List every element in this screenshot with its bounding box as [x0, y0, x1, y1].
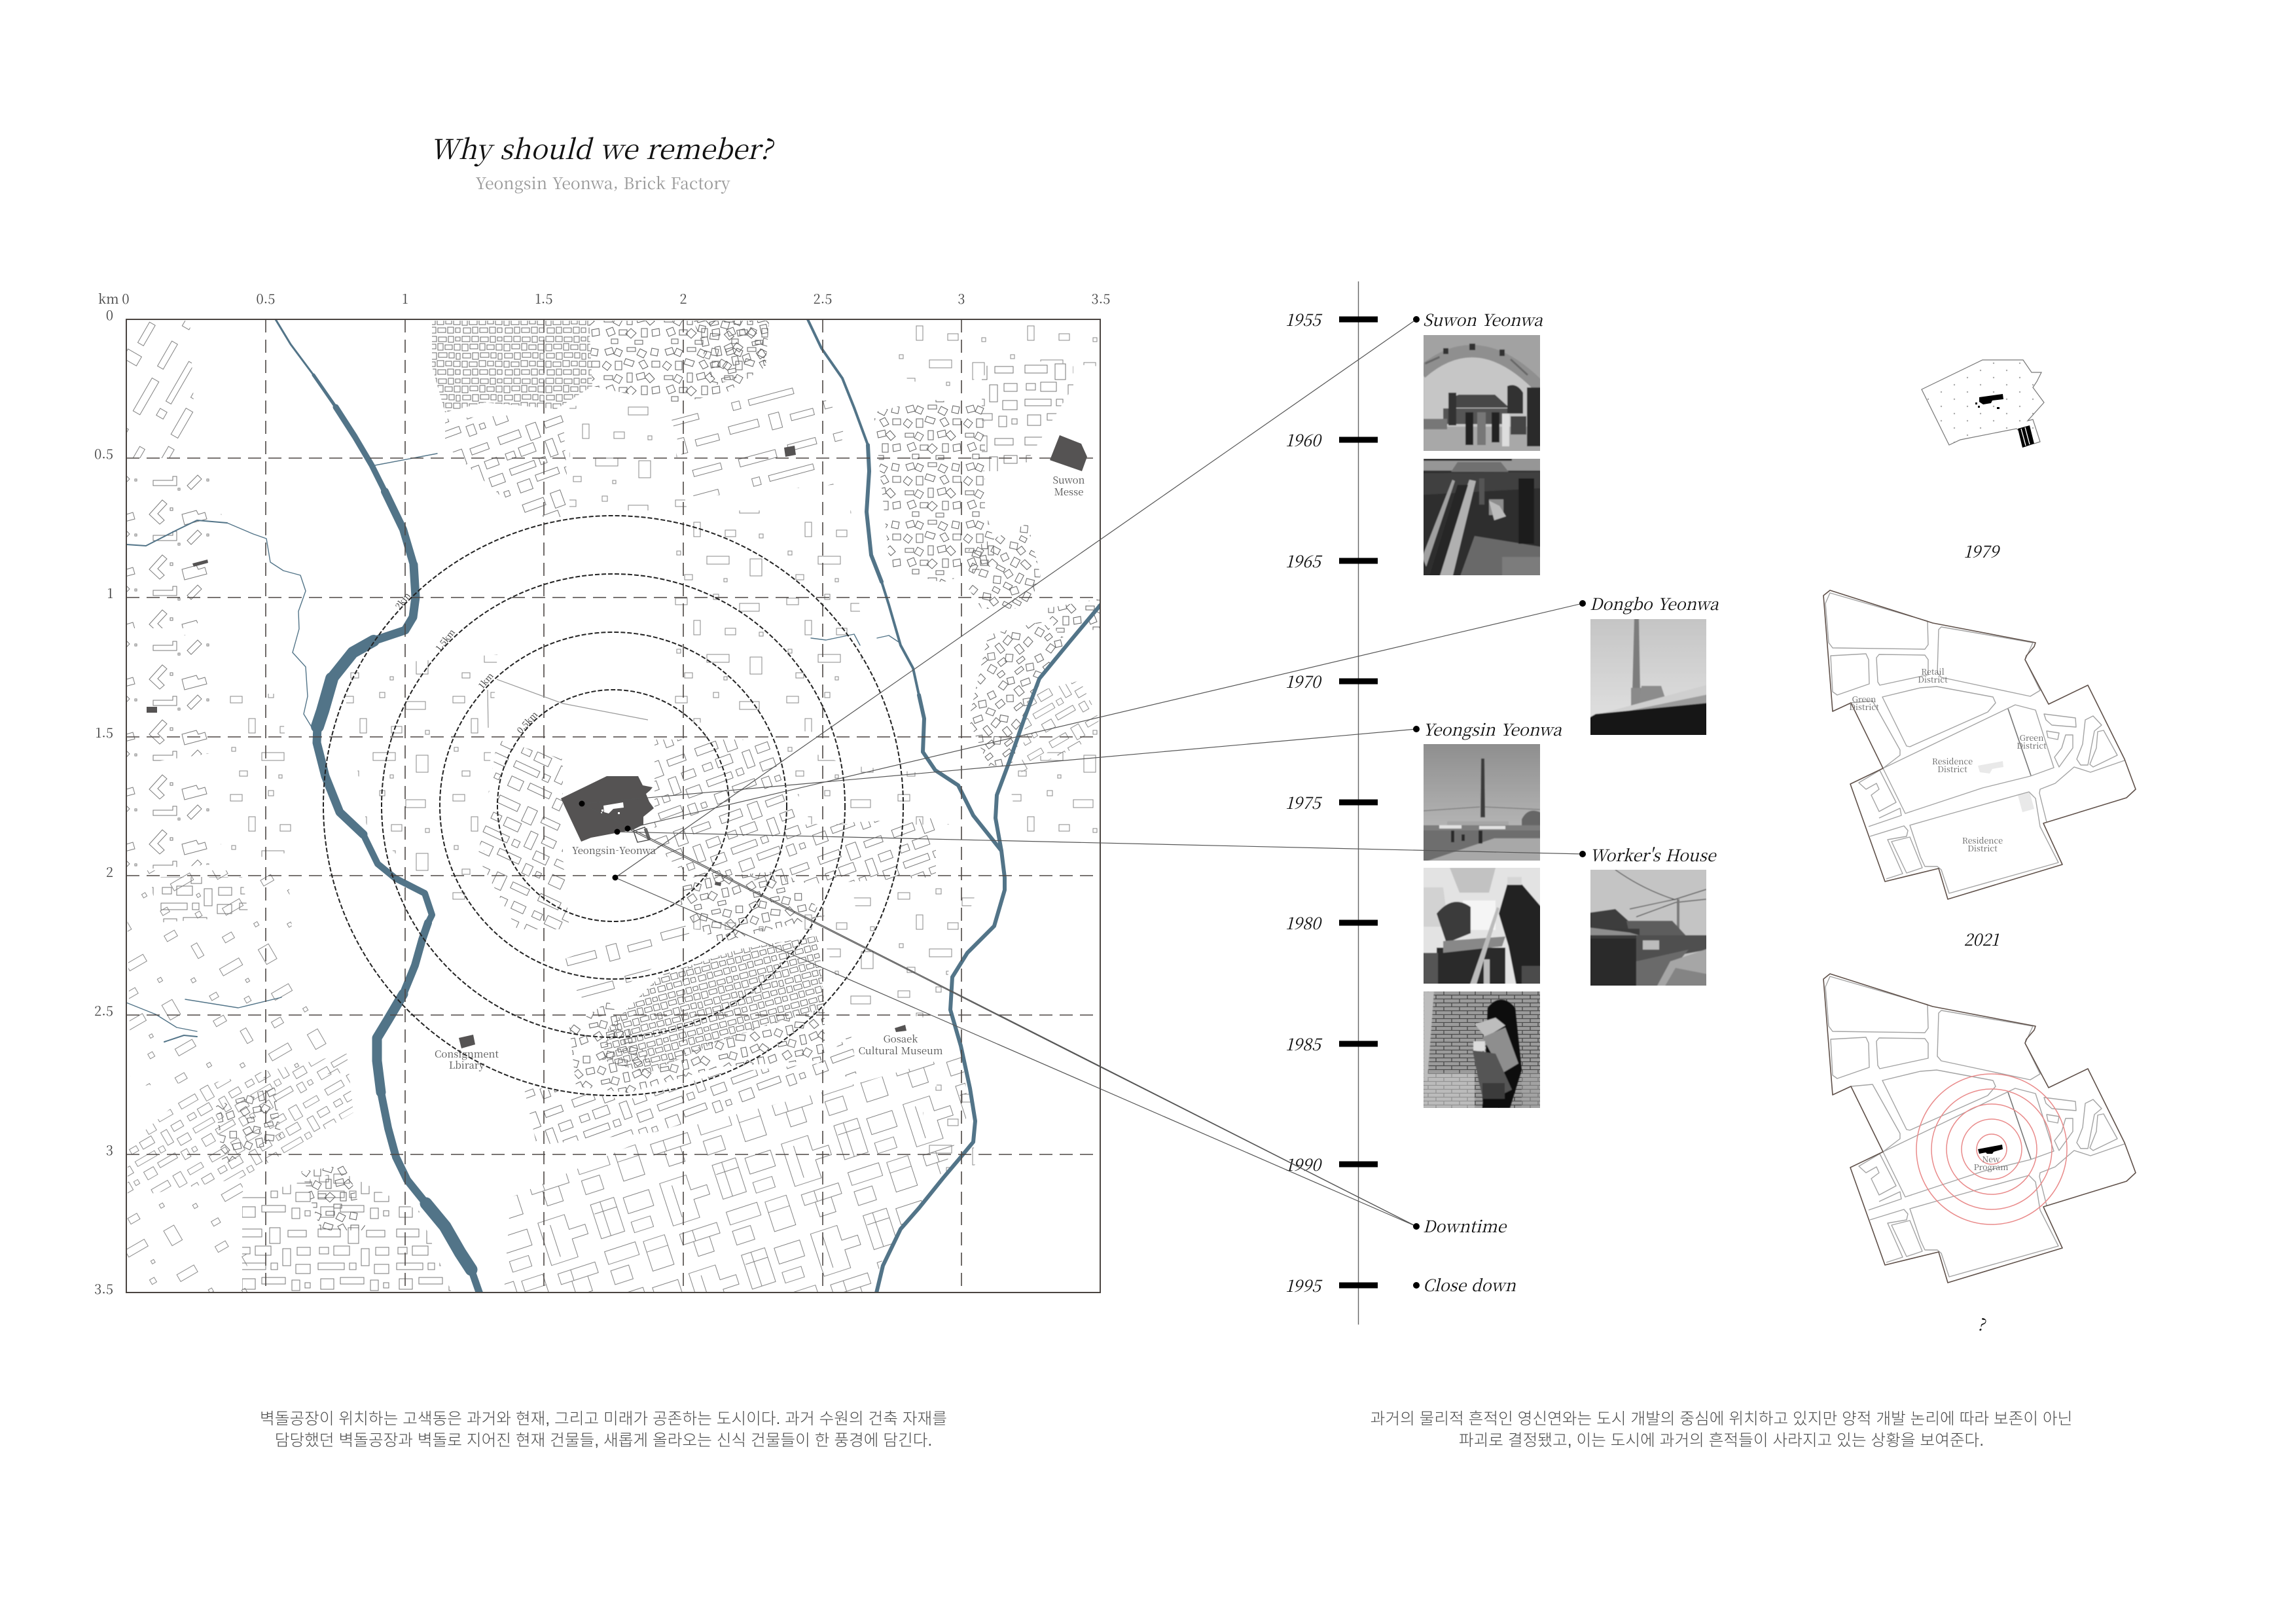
grid lines [126, 319, 1100, 1293]
landmark: Gosaek Cultural Museum [859, 1025, 943, 1058]
title: Why should we remeber? [429, 128, 776, 168]
map axis labels: 0.5 [94, 444, 113, 463]
district labels: Residence [1962, 834, 2003, 846]
distance rings: 1.5km [432, 626, 457, 654]
landmark: Gosaek Cultural Museum: Cultural Museum [859, 1044, 943, 1058]
district labels: District [1937, 763, 1967, 775]
landmark: Suwon Messe [1050, 435, 1087, 499]
district labels: District [1849, 701, 1879, 713]
influence rings [1916, 1074, 2067, 1224]
district labels: District [2017, 740, 2047, 751]
map axis labels: 3.5 [1092, 289, 1110, 308]
district labels: Residence [1932, 755, 1973, 767]
map axis labels: km [98, 289, 119, 308]
new program label: Program [1974, 1161, 2008, 1173]
year labels [1285, 308, 1323, 1297]
building footprints [126, 321, 1100, 1293]
new program building [1978, 1145, 2003, 1154]
event labels: Suwon Yeonwa [1423, 308, 1543, 331]
distance rings: 2km [392, 590, 413, 611]
map axis labels: 3 [958, 289, 965, 308]
event labels: Yeongsin Yeonwa [1423, 717, 1562, 741]
map axis labels: 3 [106, 1140, 113, 1159]
factory road outline [488, 679, 648, 728]
event labels: Close down [1423, 1273, 1516, 1296]
workers' housing 1979 [2018, 425, 2034, 448]
district labels: District [1967, 842, 1998, 854]
map axis labels: 1 [107, 583, 113, 602]
subtitle: Yeongsin Yeonwa, Brick Factory [475, 171, 730, 194]
year labels: 1965 [1285, 549, 1323, 573]
year labels: 1995 [1285, 1274, 1323, 1297]
year labels: 1990 [1285, 1152, 1323, 1176]
distance rings: 1km [475, 669, 496, 691]
map panel [94, 289, 1110, 1298]
label question mark: ? [1978, 1312, 1987, 1336]
event labels: Dongbo Yeonwa [1590, 592, 1719, 615]
site plan 2021 [1823, 590, 2136, 899]
district labels [1849, 666, 2047, 854]
year labels: 1955 [1285, 308, 1323, 331]
label 1979: 1979 [1964, 539, 2001, 563]
timeline axis [1285, 281, 1378, 1325]
leader dots [579, 316, 1586, 1289]
district labels: Green [1852, 693, 1876, 705]
year labels: 1960 [1285, 428, 1323, 452]
landmark: Suwon Messe: Messe [1054, 485, 1083, 499]
label: Yeongsin-Yeonwa: Yeongsin-Yeonwa [572, 844, 656, 857]
factory building 1979 [1975, 394, 2003, 409]
photo: man carrying bricks [1424, 991, 1540, 1108]
rivers [126, 319, 1103, 1296]
map axis labels: 2.5 [814, 289, 832, 308]
future site plan [1823, 974, 2136, 1283]
leader lines [582, 319, 1583, 1226]
photo: Yeongsin Yeonwa chimney and road [1424, 744, 1540, 861]
year labels: 1985 [1285, 1032, 1323, 1056]
caption left: 벽돌공장이 위치하는 고색동은 과거와 현재, 그리고 미래가 공존하는 도시이다. 과거 수원의 건축 자재를 [260, 1410, 947, 1428]
site plan 1979 [1922, 360, 2044, 448]
map axis labels: 3.5 [94, 1279, 113, 1298]
district labels: Retail [1921, 666, 1945, 677]
new program label: New [1982, 1153, 2000, 1165]
caption left: 담당했던 벽돌공장과 벽돌로 지어진 현재 건물들, 새롭게 올라오는 신식 건물들이 한 풍경에 담긴다. [275, 1431, 932, 1450]
factory site: Yeongsin Yeonwa [561, 776, 654, 842]
map axis labels: 0.5 [257, 289, 275, 308]
event labels: Downtime [1423, 1214, 1507, 1238]
caption right: 파괴로 결정됐고, 이는 도시에 과거의 흔적들이 사라지고 있는 상황을 보여준다. [1459, 1431, 1984, 1450]
map axis labels: 0 [106, 305, 113, 324]
distance rings: 0.5km [514, 708, 540, 736]
photo: Suwon Yeonwa gate [1424, 335, 1540, 451]
caption right: 과거의 물리적 흔적인 영신연와는 도시 개발의 중심에 위치하고 있지만 양적 개발 논리에 따라 보존이 아닌 [1371, 1410, 2072, 1428]
map axis labels [94, 289, 1110, 1298]
landmark: Suwon Messe: Suwon [1053, 473, 1085, 487]
event labels [1423, 308, 1719, 1296]
landmark: Consignment Library: Lbirary [449, 1058, 485, 1072]
map axis labels: 2.5 [94, 1001, 113, 1020]
landmark: Consignment Library: Consignment [435, 1047, 499, 1061]
map axis labels: 1.5 [535, 289, 553, 308]
map axis labels: 2 [106, 862, 113, 881]
photo: workers at a table [1424, 868, 1540, 984]
label 2021: 2021 [1964, 927, 2000, 951]
event labels: Worker's House [1590, 843, 1717, 866]
caption left [260, 1410, 947, 1450]
landmark: Gosaek Cultural Museum: Gosaek [884, 1032, 918, 1046]
caption right [1371, 1410, 2072, 1450]
map axis labels: 2 [679, 289, 687, 308]
small dark buildings [147, 446, 796, 886]
map frame [126, 319, 1100, 1293]
year labels: 1980 [1285, 911, 1323, 935]
map axis labels: 1.5 [96, 722, 113, 741]
year labels: 1970 [1285, 669, 1323, 693]
district labels: District [1918, 673, 1948, 685]
timeline ticks [1339, 319, 1378, 1285]
year labels: 1975 [1285, 791, 1323, 814]
distance rings [323, 516, 903, 1096]
photo: Dongbo Yeonwa chimney [1590, 619, 1706, 735]
district labels: Green [2020, 732, 2043, 743]
photo: brick chute workers [1424, 459, 1540, 575]
map axis labels: 1 [402, 289, 408, 308]
new program label [1974, 1153, 2008, 1173]
photo: Worker's House [1590, 870, 1706, 986]
map axis labels: 0 [122, 289, 130, 308]
landmark: Consignment Library [435, 1035, 499, 1072]
